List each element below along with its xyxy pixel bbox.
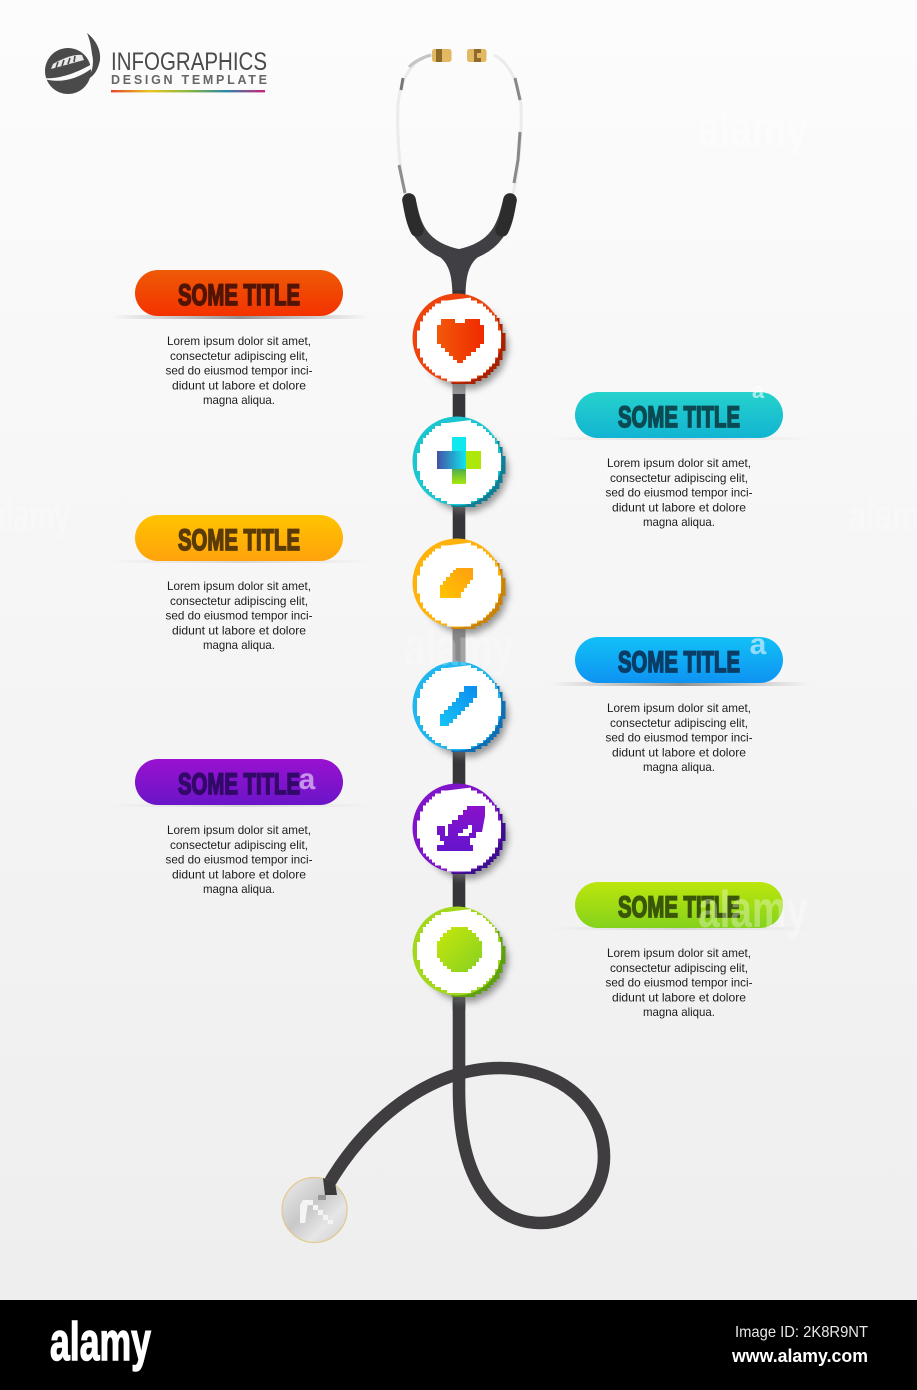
body text [166,579,313,652]
body text [166,334,313,407]
watermarks: a [752,378,765,403]
stethoscope [282,49,604,1242]
earpiece left [432,49,452,62]
title pill [135,515,343,561]
watermarks: a [750,628,767,661]
title: SOME TITLE [178,524,300,557]
body text: Lorem ipsum dolor sit amet, [607,456,751,470]
metal tube right [494,55,521,195]
body text: Lorem ipsum dolor sit amet, [607,701,751,715]
body text: didunt ut labore et dolore [172,378,306,392]
footer band [0,1300,917,1390]
chest piece [282,1178,347,1242]
title: SOME TITLE [618,646,740,679]
body text: consectetur adipiscing elit, [170,594,308,608]
body text: magna aliqua. [643,1005,715,1019]
title pill [575,392,783,438]
body text: sed do eiusmod tempor inci- [166,608,313,622]
title pill [575,882,783,928]
footer logo: alamy [50,1312,151,1372]
step 6 circle: green dot [412,906,508,1002]
logo subtitle: DESIGN TEMPLATE [111,73,267,87]
earpiece right [467,49,486,62]
body text [606,456,753,529]
panel: right 3 [550,882,810,1019]
step 2 circle: cross [412,416,508,512]
panel: left 2 [110,515,370,652]
body text: consectetur adipiscing elit, [170,838,308,852]
icon: capsule [440,686,477,726]
metal tube left [398,55,433,195]
icon: heart [437,319,484,363]
body text: consectetur adipiscing elit, [170,349,308,363]
step 1 circle: heart [412,294,508,389]
watermarks: alamy [698,100,808,158]
title pill [575,637,783,683]
title: SOME TITLE [178,279,300,312]
body text [166,823,313,896]
icon: medical cross [437,437,481,484]
body text: Lorem ipsum dolor sit amet, [167,823,311,837]
body text: Lorem ipsum dolor sit amet, [607,946,751,960]
watermarks [0,100,917,939]
body text: sed do eiusmod tempor inci- [166,852,313,866]
watermarks: alamy [698,881,808,939]
body text: didunt ut labore et dolore [612,746,746,760]
title pill [135,759,343,805]
body text: magna aliqua. [203,638,275,652]
title pill [135,270,343,316]
tube loop [327,1000,604,1223]
body text: consectetur adipiscing elit, [610,716,748,730]
body text: consectetur adipiscing elit, [610,961,748,975]
icon: chair [437,806,485,851]
body text [606,701,753,774]
logo mark [41,33,100,94]
watermarks: a [299,763,316,796]
icon: octagon [437,927,482,972]
step 5 circle: dental chair [412,784,508,879]
icon: tablet [440,568,473,598]
central tube [453,290,465,1010]
body text [606,946,753,1019]
body text: didunt ut labore et dolore [612,500,746,514]
body text: sed do eiusmod tempor inci- [166,364,313,378]
rainbow line [111,90,265,92]
panel: right 2 [550,637,810,774]
y-shaped tube [409,200,510,295]
image id: Image ID: 2K8R9NT [735,1324,868,1341]
website: www.alamy.com [731,1346,868,1366]
step 4 circle: capsule [412,662,508,757]
logo title: INFOGRAPHICS [111,48,267,76]
panel: left 3 [110,759,370,896]
body text: magna aliqua. [643,760,715,774]
logo [41,33,267,94]
title: SOME TITLE [618,891,740,924]
body text: didunt ut labore et dolore [172,624,306,638]
body text: magna aliqua. [203,882,275,896]
title: SOME TITLE [618,401,740,434]
body text: magna aliqua. [203,393,275,407]
panel: right 1 [550,392,810,529]
body text: sed do eiusmod tempor inci- [606,730,753,744]
body text: didunt ut labore et dolore [172,868,306,882]
watermarks: alamy [404,619,514,677]
body text: consectetur adipiscing elit, [610,471,748,485]
body text: magna aliqua. [643,515,715,529]
body text: sed do eiusmod tempor inci- [606,976,753,990]
body text: didunt ut labore et dolore [612,990,746,1004]
body text: Lorem ipsum dolor sit amet, [167,579,311,593]
body text: sed do eiusmod tempor inci- [606,486,753,500]
title: SOME TITLE [178,768,300,801]
body text: Lorem ipsum dolor sit amet, [167,334,311,348]
step 3 circle: pill [412,538,508,634]
panel: left 1 [110,270,370,407]
